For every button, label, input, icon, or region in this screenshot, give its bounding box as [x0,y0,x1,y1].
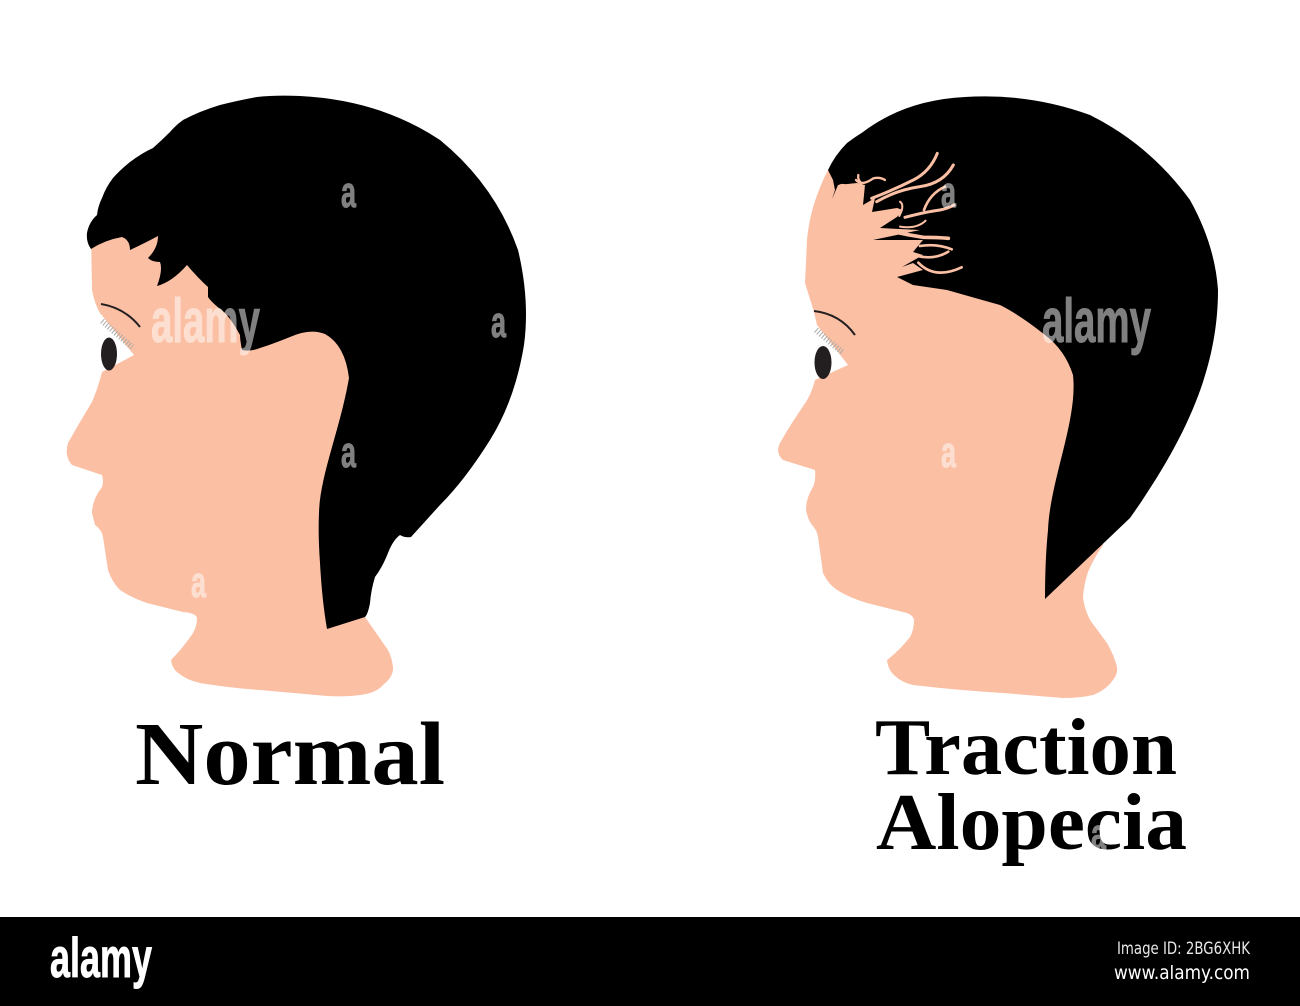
hair with frayed hairline: traction alopecia head [828,96,1218,599]
watermarks: a [491,298,506,347]
watermarks: alamy [1042,287,1151,356]
watermarks: a [341,428,356,477]
eyebrow: normal head [101,304,140,327]
watermarks: a [941,428,956,477]
image id: Image ID: 2BG6XHK [1117,939,1251,959]
hair strands: traction alopecia head [838,153,962,273]
eye: traction alopecia head [814,346,832,379]
panel: traction alopecia head [778,96,1218,698]
panel: normal head [67,96,526,696]
watermarks: a [191,558,206,607]
eyelashes: normal head [102,321,132,347]
footer logo: alamy [50,926,152,989]
skin: traction alopecia head [778,170,1117,698]
footer bar [0,917,1300,1006]
watermarks: a [941,168,956,217]
heading: traction alopecia [875,704,1187,867]
watermarks [151,168,1151,859]
eyelashes: traction alopecia head [816,330,843,353]
heading: normal: Normal [135,705,445,804]
watermarks: a [1091,810,1106,859]
website: www.alamy.com [1114,962,1250,984]
eye: normal head [101,338,117,370]
skin: normal head [67,232,393,696]
hair: normal head [87,96,526,629]
heading: traction alopecia: Traction [875,704,1177,792]
heading: traction alopecia: Alopecia [876,779,1187,867]
watermarks: alamy [151,287,260,356]
watermarks: a [341,168,356,217]
eyebrow: traction alopecia head [814,311,855,335]
